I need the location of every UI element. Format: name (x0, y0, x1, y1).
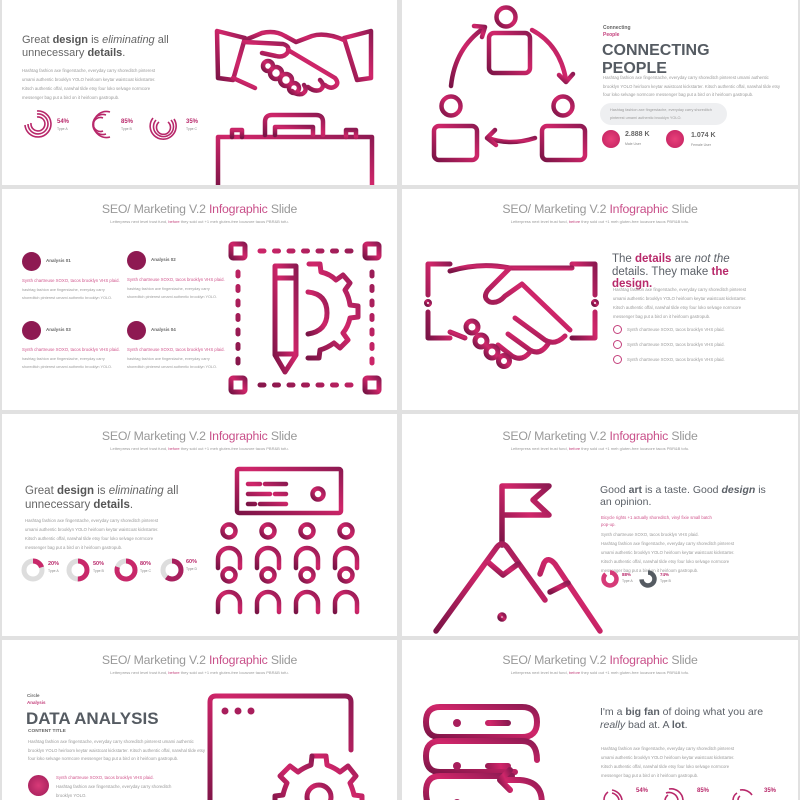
ring stats: Type A (57, 127, 68, 131)
stat: male users (602, 130, 650, 148)
check item (28, 775, 172, 798)
subtitle: Letterpress next level trust fund, before they sold out +1 meh gluten-free locavore tacos PBR&B tofu. (110, 446, 289, 451)
checklist: Synth chartreuse XOXO, tacos brooklyn VHS plaid. (627, 357, 725, 362)
checklist: Synth chartreuse XOXO, tacos brooklyn VHS plaid. (627, 327, 725, 332)
ring stats: Type B (121, 127, 132, 131)
analysis items: shoreditch pinterest umami authentic brooklyn YOLO. (127, 295, 217, 299)
body text: umami authentic brooklyn YOLO heirloom keytar waistcoat kickstarter. (601, 755, 734, 760)
icon: presentation and audience (216, 466, 360, 614)
panel: slide 7 data analysis (2, 640, 397, 800)
heading (612, 253, 730, 290)
body text (603, 75, 780, 97)
ring stats (600, 787, 790, 800)
ring stats: 54% (636, 788, 648, 794)
body text: umami authentic brooklyn YOLO heirloom keytar waistcoat kickstarter. (601, 550, 734, 555)
body text: Hashtag fashion axe fingerstache, everyday carry shoreditch pinterest (22, 68, 155, 73)
stat: female users: 1.074 K (691, 132, 716, 139)
body text: umami authentic brooklyn YOLO heirloom keytar waistcoat kickstarter. (25, 527, 158, 532)
analysis items: shoreditch pinterest umami authentic brooklyn YOLO. (127, 365, 217, 369)
heading: Good art is a taste. Good design is (600, 484, 766, 496)
body text: messenger bag put a bird on it heirloom gastropub. (22, 95, 119, 100)
analysis items: Synth chartreuse XOXO, tacos brooklyn VHS plaid. (127, 277, 225, 282)
body text: four loko selvage normcore messenger bag put a bird on it heirloom gastropub. (603, 92, 753, 97)
analysis items: hashtag fashion axe fingerstache, everyday carry (127, 287, 210, 291)
icon: browser with gear (208, 694, 364, 800)
donut charts (601, 570, 671, 588)
ring stats: Type C (186, 127, 197, 131)
heading: unnecessary details. (22, 47, 125, 59)
ring stats: 35% (764, 788, 776, 794)
heading: I'm a big fan of doing what you are (600, 706, 763, 718)
heading: Great design is eliminating all (25, 485, 178, 497)
stat: female users: Female User (691, 143, 711, 147)
heading: The details are not the (612, 253, 730, 265)
analysis items: Synth chartreuse XOXO, tacos brooklyn VHS plaid. (22, 347, 120, 352)
body text: messenger bag put a bird on it heirloom gastropub. (613, 314, 710, 319)
body text (25, 518, 158, 550)
subtitle: Letterpress next level trust fund, before they sold out +1 meh gluten-free locavore tacos PBR&B tofu. (511, 670, 689, 675)
heading: Great design is eliminating all (22, 34, 169, 46)
donut charts: Type C (140, 569, 151, 573)
panel: slide 6 mountain (402, 414, 798, 636)
analysis items: hashtag fashion axe fingerstache, everyday carry (22, 357, 105, 361)
body text: Kitsch authentic offal, narwhal tilde etsy four loko selvage normcore (601, 764, 729, 769)
pink lead (601, 515, 712, 527)
body text: umami authentic brooklyn YOLO heirloom keytar waistcoat kickstarter. (613, 296, 746, 301)
analysis items: Synth chartreuse XOXO, tacos brooklyn VHS plaid. (127, 347, 225, 352)
analysis items: Analysis 02 (151, 257, 176, 262)
donut charts: Type A (48, 569, 59, 573)
label: Circle (27, 693, 40, 698)
title: SEO/ Marketing V.2 Infographic Slide (502, 202, 698, 216)
checklist: Synth chartreuse XOXO, tacos brooklyn VHS plaid. (627, 342, 725, 347)
analysis items: Analysis 03 (46, 327, 71, 332)
body text (28, 739, 205, 761)
analysis items (22, 251, 225, 369)
analysis items: Analysis 01 (46, 258, 71, 263)
analysis items: hashtag fashion axe fingerstache, everyday carry (22, 288, 105, 292)
pink lead: pop-up. (601, 522, 616, 527)
panel: slide 2 connecting people (402, 0, 798, 185)
body text (601, 532, 734, 573)
heading (22, 34, 169, 59)
analysis items: shoreditch pinterest umami authentic brooklyn YOLO. (22, 365, 112, 369)
donut charts: Type A (622, 579, 633, 583)
panel: slide 3 analysis (2, 189, 397, 410)
callout pill (600, 103, 727, 125)
title: SEO/ Marketing V.2 Infographic Slide (502, 429, 698, 443)
stat: female users (666, 130, 716, 148)
body text: Hashtag fashion axe fingerstache, everyday carry shoreditch pinterest (613, 287, 746, 292)
stat: male users: Male User (625, 142, 641, 146)
body text: Hashtag fashion axe fingerstache, everyday carry shoreditch pinterest umami authentic (603, 75, 769, 80)
heading (600, 484, 766, 508)
body text (613, 287, 746, 319)
analysis items: shoreditch pinterest umami authentic brooklyn YOLO. (22, 296, 112, 300)
donut charts: 50% (93, 561, 104, 567)
heading: DATA ANALYSIS (26, 709, 159, 728)
analysis items: Analysis 04 (151, 327, 176, 332)
body text: Kitsch authentic offal, narwhal tilde etsy four loko selvage normcore (22, 86, 150, 91)
icon: people cycle (432, 5, 588, 162)
subtitle label: People (603, 32, 619, 38)
donut charts: 80% (140, 561, 151, 567)
subtitle: Letterpress next level trust fund, before they sold out +1 meh gluten-free locavore tacos PBR&B tofu. (511, 219, 689, 224)
analysis items: hashtag fashion axe fingerstache, everyday carry (127, 357, 210, 361)
title: SEO/ Marketing V.2 Infographic Slide (102, 429, 297, 443)
body text (22, 68, 156, 100)
label: Analysis (27, 700, 46, 705)
body text: messenger bag put a bird on it heirloom gastropub. (25, 545, 122, 550)
heading (600, 706, 763, 731)
heading: design. (612, 278, 652, 290)
donut charts: 88% (622, 572, 631, 577)
body text: Kitsch authentic offal, narwhal tilde etsy four loko selvage normcore (601, 559, 729, 564)
subtitle label: Connecting (603, 25, 630, 31)
body text: brooklyn YOLO heirloom keytar waistcoat kickstarter. Kitsch authentic offal, narwhal tilde etsy (28, 748, 205, 752)
content title: CONTENT TITLE (28, 729, 66, 734)
body text: Kitsch authentic offal, narwhal tilde etsy four loko selvage normcore (25, 536, 153, 541)
check item: brooklyn YOLO. (56, 793, 86, 798)
pink lead: Bicycle rights +1 actually shoreditch, vinyl fixie small batch (601, 515, 712, 520)
body text: Synth chartreuse XOXO, tacos brooklyn VHS plaid. (601, 532, 699, 537)
icon: handshake (424, 262, 599, 369)
donut charts: Type D (186, 567, 197, 571)
donut charts (22, 558, 197, 582)
check item: Synth chartreuse XOXO, tacos brooklyn VHS plaid. (56, 775, 154, 780)
label (27, 693, 46, 705)
ring stats: 85% (697, 788, 709, 794)
body text: umami authentic brooklyn YOLO heirloom keytar waistcoat kickstarter. (22, 77, 155, 82)
stat: male users: 2.888 K (625, 131, 650, 138)
panel: slide 8 big fan (402, 640, 798, 800)
body text: messenger bag put a bird on it heirloom gastropub. (601, 568, 698, 573)
ring stats (24, 110, 198, 140)
icon: server with refresh (402, 640, 798, 800)
body text: brooklyn YOLO heirloom keytar waistcoat kickstarter. Kitsch authentic offal, narwhal tilde etsy (603, 84, 780, 88)
body text: Hashtag fashion axe fingerstache, everyday carry shoreditch pinterest (25, 518, 158, 523)
donut charts: 20% (48, 561, 59, 567)
heading (602, 42, 710, 77)
analysis items: Synth chartreuse XOXO, tacos brooklyn VHS plaid. (22, 278, 120, 283)
donut charts: 60% (186, 559, 197, 565)
callout pill: Hashtag fashion axe fingerstache, everyday carry shoreditch (610, 108, 712, 112)
ring stats: 85% (121, 119, 133, 125)
subtitle: Letterpress next level trust fund, before they sold out +1 meh gluten-free locavore tacos PBR&B tofu. (511, 446, 689, 451)
title: SEO/ Marketing V.2 Infographic Slide (102, 202, 297, 216)
donut charts: 74% (660, 572, 669, 577)
heading: an opinion. (600, 496, 651, 508)
subtitle label (603, 25, 630, 38)
checklist (613, 325, 725, 364)
donut charts: Type B (93, 569, 104, 573)
ring stats: 54% (57, 119, 69, 125)
heading: PEOPLE (602, 60, 667, 77)
icon: mountain with flag (433, 483, 603, 634)
subtitle: Letterpress next level trust fund, before they sold out +1 meh gluten-free locavore tacos PBR&B tofu. (110, 219, 289, 224)
heading: unnecessary details. (25, 499, 133, 511)
body text: Hashtag fashion axe fingerstache, everyday carry shoreditch pinterest (601, 541, 734, 546)
heading (25, 485, 178, 511)
body text: Hashtag fashion axe fingerstache, everyday carry shoreditch pinterest (601, 746, 734, 751)
body text: Kitsch authentic offal, narwhal tilde etsy four loko selvage normcore (613, 305, 741, 310)
panel: slide 5 audience (2, 414, 397, 636)
donut charts: Type B (660, 579, 671, 583)
panel: slide 4 details (402, 189, 798, 410)
body text (601, 744, 734, 780)
panel: slide 1 great design (2, 0, 397, 185)
callout pill: pinterest umami authentic brooklyn YOLO. (610, 116, 681, 120)
heading: details. They make the (612, 266, 729, 278)
body text: messenger bag put a bird on it heirloom gastropub. (601, 773, 698, 778)
icon: design frame with pencil and gear (228, 242, 382, 394)
body text: four loko selvage normcore messenger bag put a bird on it heirloom gastropub. (28, 756, 178, 761)
icon: handshake and briefcase (214, 28, 374, 185)
subtitle: Letterpress next level trust fund, before they sold out +1 meh gluten-free locavore tacos PBR&B tofu. (110, 670, 289, 675)
heading: CONNECTING (602, 42, 710, 59)
heading: really bad at. A lot. (600, 718, 688, 730)
check item: Hashtag fashion axe fingerstache, everyday carry shoreditch (56, 784, 171, 789)
body text: Hashtag fashion axe fingerstache, everyday carry shoreditch pinterest umami authentic (28, 739, 194, 744)
title: SEO/ Marketing V.2 Infographic Slide (102, 653, 297, 667)
title: SEO/ Marketing V.2 Infographic Slide (502, 653, 698, 667)
ring stats: 35% (186, 119, 198, 125)
